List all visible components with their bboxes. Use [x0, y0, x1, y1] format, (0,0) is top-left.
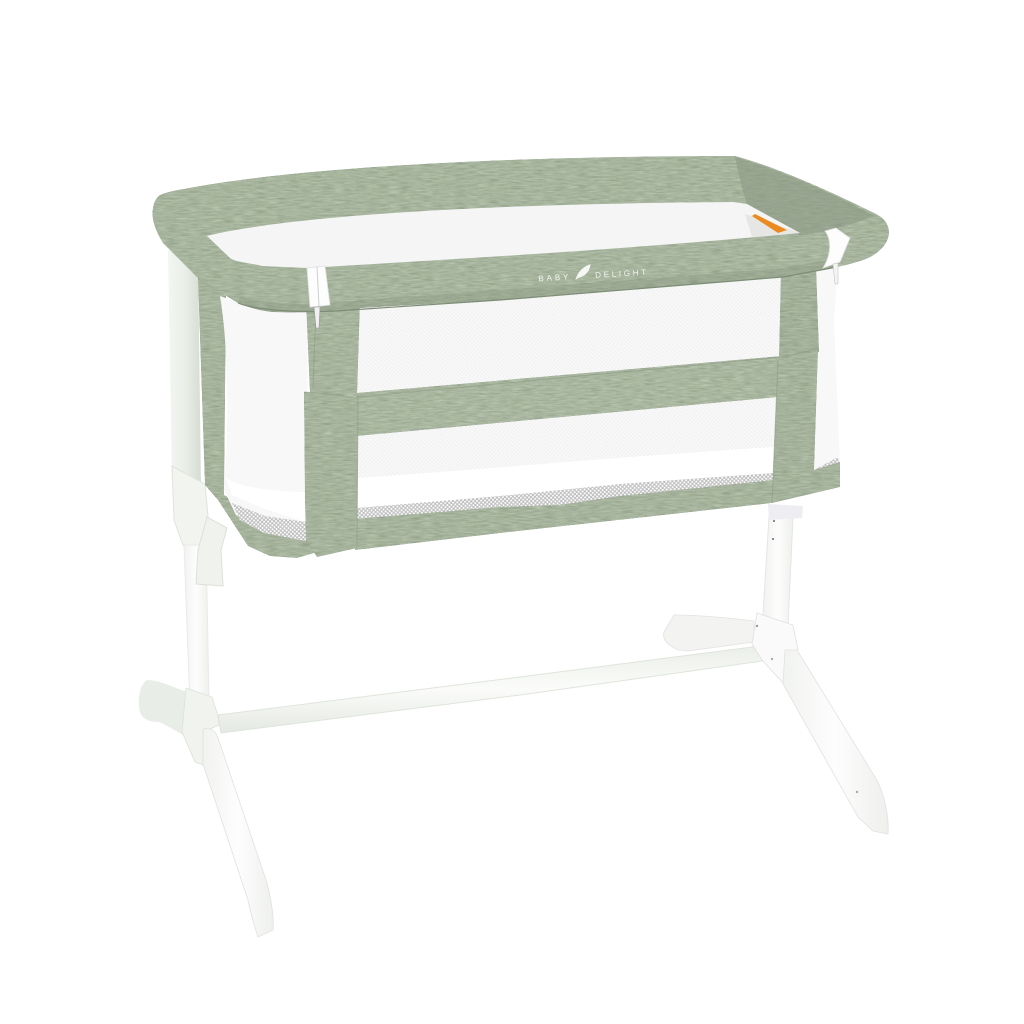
brand logo [538, 261, 649, 283]
left zipper pull tab [307, 266, 330, 328]
rim fabric [152, 156, 889, 312]
upper window [356, 270, 785, 393]
right mesh side [813, 262, 840, 480]
left fabric side [198, 278, 317, 558]
left upright post [168, 250, 201, 490]
left lower mesh strip [232, 503, 306, 541]
left mattress edge [226, 478, 306, 522]
brand name second word: DELIGHT [595, 268, 649, 280]
left mesh [220, 296, 308, 541]
mattress edge [357, 447, 775, 512]
mattress floor [207, 202, 800, 268]
right upright post [763, 504, 803, 625]
front fabric panels [304, 266, 840, 557]
orange tag [752, 214, 787, 233]
left front leg [203, 728, 273, 937]
left back foot [139, 680, 187, 736]
front mesh windows [356, 270, 785, 520]
lower mesh strip [357, 473, 774, 520]
left hub [182, 688, 219, 765]
right hub [752, 613, 798, 684]
right inner wall shading [735, 157, 874, 236]
front rail underside shading [238, 258, 840, 312]
right front leg [783, 650, 888, 834]
right back foot [664, 615, 754, 651]
rear legs and left post [168, 250, 227, 705]
left sliding sleeve [172, 466, 208, 545]
brand name: BABY [538, 272, 572, 283]
feather icon [575, 264, 591, 280]
crossbar [218, 645, 769, 733]
left base [139, 680, 273, 937]
care label [745, 214, 800, 237]
left clip tab [196, 517, 227, 586]
left lower post [184, 545, 209, 705]
right base [218, 613, 888, 834]
lower window [356, 395, 777, 520]
fabric strips [304, 266, 840, 557]
rail underside seam [238, 267, 837, 312]
left mesh side and fabric panel [198, 278, 317, 558]
right zipper pull tab [823, 228, 850, 284]
panel seams [304, 310, 818, 548]
rim [152, 156, 889, 328]
